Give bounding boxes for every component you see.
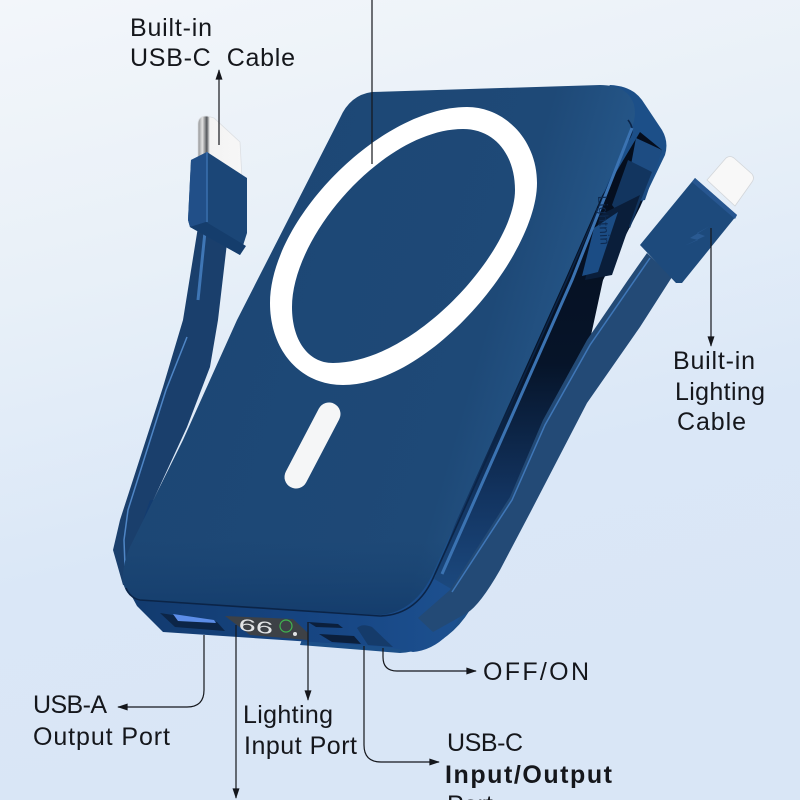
callout: display leader	[235, 625, 237, 798]
LED display: 66	[238, 615, 274, 638]
callout: top magnetic leader	[371, 0, 373, 164]
callout: Built-in Lighting Cable	[673, 228, 765, 436]
seam	[126, 120, 632, 616]
connector housing	[640, 178, 737, 283]
metal tip	[707, 156, 754, 206]
right flat Lightning cable, front part	[418, 253, 672, 632]
USB-C port lower	[319, 634, 361, 644]
callout: OFF/ON	[383, 648, 589, 686]
USB-C connector	[188, 116, 247, 255]
power bank body	[123, 85, 635, 652]
callout: OFF/ON: OFF/ON	[483, 658, 589, 686]
USB-C port upper	[308, 622, 343, 628]
engraved Lightning label: Lightnin	[595, 195, 613, 246]
Lightning connector	[640, 156, 754, 283]
callout: Built-in Lighting Cable: Lighting	[675, 378, 765, 406]
callout: Lighting Input Port: Lighting	[243, 701, 333, 729]
left flat USB-C cable	[113, 227, 227, 590]
callout: USB-C Input/Output Port	[364, 646, 613, 800]
callout: Built-in USB-C Cable: Built-in	[130, 14, 212, 42]
callout: Lighting Input Port	[243, 622, 357, 760]
callout: USB-A Output Port	[33, 635, 204, 751]
USB-A port	[160, 613, 225, 631]
callout: USB-C Input/Output Port: USB-C	[447, 729, 523, 757]
callout: Built-in USB-C Cable	[130, 14, 295, 145]
callout: Built-in USB-C Cable: USB-C Cable	[130, 44, 295, 72]
lower shell	[123, 500, 470, 652]
connector housing	[188, 152, 247, 255]
metal tip	[198, 116, 242, 178]
LED display	[225, 615, 308, 640]
alignment pill	[296, 414, 329, 477]
rear shell and cable gap	[300, 85, 666, 653]
callout: USB-A Output Port: Output Port	[33, 723, 170, 751]
callout: Lighting Input Port: Input Port	[244, 732, 357, 760]
callout: Built-in Lighting Cable: Cable	[677, 408, 746, 436]
power button	[357, 625, 393, 647]
callout: USB-C Input/Output Port: Input/Output	[445, 761, 613, 789]
callout: USB-A Output Port: USB-A	[33, 691, 107, 719]
bolt mark	[684, 226, 710, 246]
port panel	[160, 613, 393, 647]
magnetic ring	[270, 107, 537, 385]
front face	[123, 85, 635, 615]
callout: Built-in Lighting Cable: Built-in	[673, 347, 755, 375]
